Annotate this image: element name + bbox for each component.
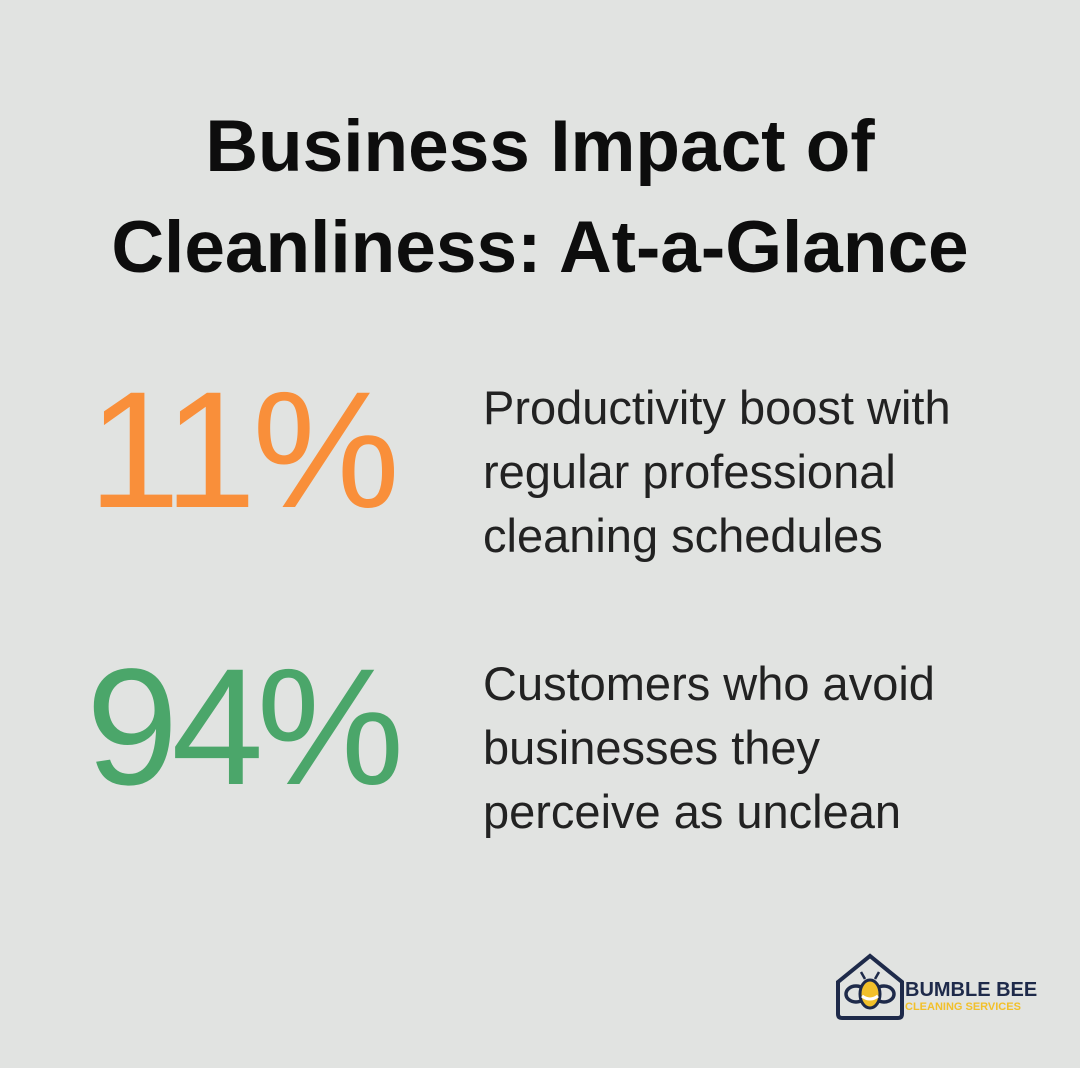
text: productivity [483, 381, 951, 562]
stat: 94%: 94% [86, 635, 397, 820]
text: productivity: cleaning schedules [483, 509, 883, 562]
text: customers: perceive as unclean [483, 785, 901, 838]
title [111, 106, 969, 288]
text: productivity: Productivity boost with [483, 381, 951, 434]
text: customers: businesses they [483, 721, 820, 774]
text: brand: BUMBLE BEE [905, 979, 1037, 1001]
text: customers [483, 657, 935, 838]
title: Business Impact of [205, 106, 875, 187]
text: productivity: regular professional [483, 445, 896, 498]
logo: CLEANING SERVICES [905, 1001, 1021, 1013]
title: Cleanliness: At-a-Glance [111, 207, 969, 288]
stat: 11%: 11% [88, 358, 396, 543]
text: customers: Customers who avoid [483, 657, 935, 710]
logo [836, 954, 1037, 1020]
icon: house bee [836, 954, 904, 1020]
